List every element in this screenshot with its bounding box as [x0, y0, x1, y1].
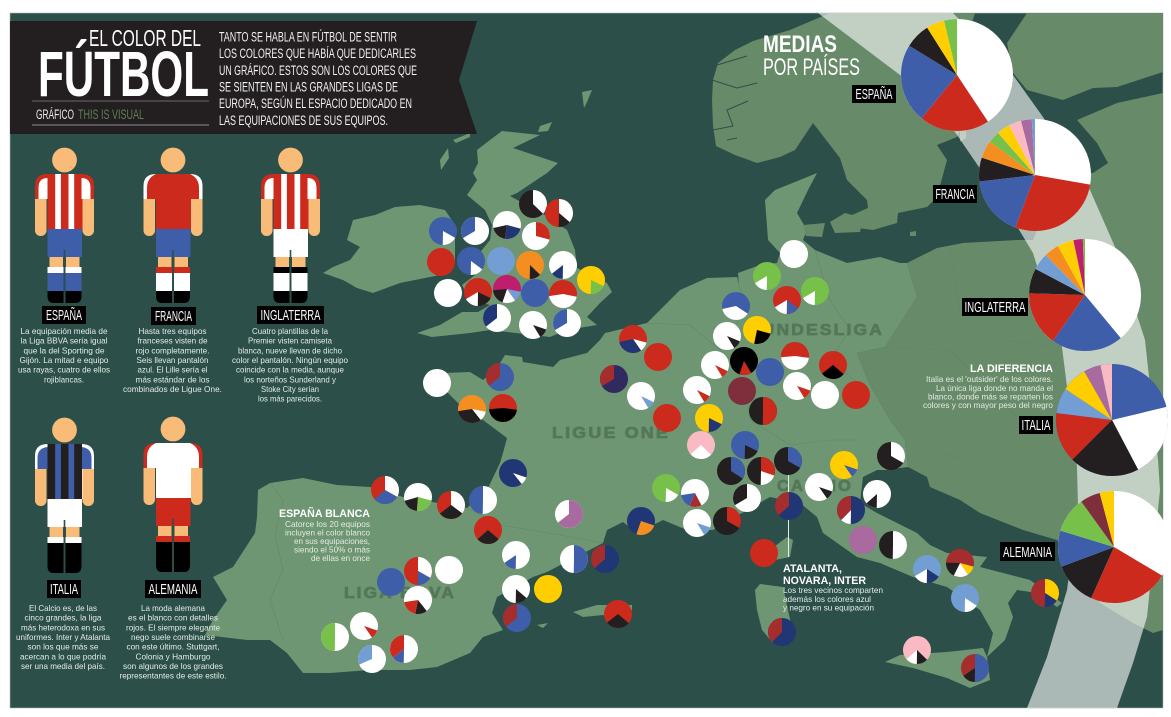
pie — [499, 459, 527, 487]
label: Alemania — [145, 580, 201, 598]
pie — [731, 431, 759, 459]
text: Inglaterra: los más parecidos. — [258, 394, 322, 404]
Norwegian fjords — [712, 56, 757, 140]
label: España: ESPAÑA — [46, 307, 82, 324]
text: Francia: azul. El Lille sería el — [138, 365, 208, 375]
label: Francia: FRANCIA — [155, 308, 192, 325]
player: Italia kit — [35, 418, 94, 573]
callout: Atalanta, Novara, Inter: NOVARA, INTER — [783, 575, 866, 587]
callout body: de ellas en once — [311, 553, 370, 563]
callout: La diferencia: La única liga donde no manda el — [936, 383, 1053, 393]
pie — [600, 365, 628, 393]
title line: Fútbol: FÚTBOL — [38, 38, 209, 110]
label: Italia: ITALIA — [50, 581, 78, 598]
pie — [522, 222, 550, 250]
team pies: Spain and southern France — [321, 363, 632, 673]
text: Francia: rojo completamente. — [136, 345, 210, 355]
label: Italia average — [1019, 416, 1053, 434]
text: Italia: uniformes. Inter y Atalanta — [16, 632, 110, 642]
pie — [553, 309, 581, 337]
text: Alemania — [120, 603, 226, 681]
pie — [627, 507, 655, 535]
pie — [830, 451, 858, 479]
map: landmasses of Europe — [205, 13, 1163, 688]
label: Inglaterra average: INGLATERRA — [964, 299, 1026, 316]
text: Inglaterra: blanca, nueve llevan de dicho — [238, 345, 342, 355]
text: Alemania: representantes de este estilo. — [120, 671, 226, 681]
callout body: en sus equipaciones, — [294, 536, 370, 546]
pie — [730, 347, 758, 375]
callout heading: ESPAÑA BLANCA — [279, 507, 370, 520]
pie — [728, 377, 756, 405]
text: España: usa rayas, cuatro de ellos — [18, 365, 110, 375]
team pies: England — [427, 190, 605, 339]
text: España: Gijón. La mitad e equipo — [20, 355, 109, 365]
pie — [404, 557, 432, 585]
country borders — [270, 130, 1062, 640]
header ribbon — [10, 21, 477, 134]
pie — [555, 500, 583, 528]
pie — [604, 600, 632, 628]
pie — [458, 395, 486, 423]
credit name: THIS IS VISUAL — [78, 107, 144, 122]
pie — [644, 343, 672, 371]
pie — [805, 473, 833, 501]
pie — [627, 382, 655, 410]
label: Italia — [47, 580, 81, 598]
pie — [390, 635, 418, 663]
text: Italia: más heterodoxa en sus — [21, 622, 105, 632]
pie — [756, 358, 784, 386]
intro text: UN GRÁFICO. ESTOS SON LOS COLORES QUE — [219, 63, 417, 78]
text: Francia — [123, 326, 222, 394]
land: Mallorca and Ibiza — [537, 605, 632, 628]
pie — [619, 325, 647, 353]
text: España: la Liga BBVA sería igual — [20, 336, 108, 346]
pie — [474, 516, 502, 544]
text: Italia: cinco grandes, la liga — [24, 613, 102, 623]
team pies: Germany and France — [600, 240, 870, 459]
text: Inglaterra: coincide con la media, aunque — [236, 365, 344, 375]
pie — [502, 575, 530, 603]
label: Francia average — [933, 185, 977, 203]
intro text: LAS EQUIPACIONES DE SUS EQUIPOS. — [219, 113, 388, 128]
label: Alemania average — [1000, 542, 1055, 561]
pie — [437, 491, 465, 519]
label: España average: ESPAÑA — [856, 86, 892, 103]
land: eastern Europe — [857, 93, 1163, 633]
label: Francia — [151, 307, 196, 325]
pie — [780, 240, 808, 268]
league name: Calcio: CALCIO — [777, 478, 853, 495]
pie — [722, 292, 750, 320]
pie — [591, 545, 619, 573]
text: España: que la del Sporting de — [24, 345, 105, 355]
pie — [516, 251, 544, 279]
text: Inglaterra: color el pantalón. Ningún equipo — [232, 355, 348, 365]
pie — [768, 618, 796, 646]
land: Ireland — [323, 205, 455, 293]
pie — [946, 549, 974, 577]
pie — [489, 394, 517, 422]
pie — [687, 431, 715, 459]
text: Inglaterra: Cuatro plantillas de la — [252, 326, 328, 336]
callout: Atalanta, Novara, Inter: ATALANTA, — [783, 563, 842, 575]
text: Italia: acercan a lo que podría — [20, 651, 106, 661]
callout body: siendo el 50% o más — [294, 544, 370, 554]
pie — [483, 304, 511, 332]
pie — [653, 404, 681, 432]
pie — [842, 381, 870, 409]
pie — [377, 568, 405, 596]
pie — [733, 484, 761, 512]
credit: GRÁFICO — [36, 107, 74, 122]
pie — [879, 531, 907, 559]
label: Alemania: ALEMANIA — [148, 581, 198, 598]
text: Italia: El Calcio es, de las — [29, 603, 97, 613]
text: España: rojiblancas. — [44, 374, 84, 384]
text: Alemania: con este último. Stuttgart, — [126, 642, 220, 652]
big pie: Italia — [1056, 364, 1168, 476]
intro text: EUROPA, SEGÚN EL ESPACIO DEDICADO EN — [219, 96, 412, 111]
pie — [1031, 579, 1059, 607]
label: España average — [852, 85, 896, 103]
pie — [502, 541, 530, 569]
pie — [903, 636, 931, 664]
title block — [32, 25, 209, 125]
land: Sicily — [885, 648, 990, 688]
pie — [434, 279, 462, 307]
player: España kit — [35, 148, 94, 303]
pie — [519, 190, 547, 218]
land: western and central Europe — [205, 173, 1062, 673]
callout: La diferencia: Italia es el 'outsider' de los colores. — [926, 374, 1053, 384]
pie — [701, 351, 729, 379]
intro text: TANTO SE HABLA EN FÚTBOL DE SENTIR — [219, 30, 397, 45]
pie — [951, 584, 979, 612]
text: Francia: Hasta tres equipos — [138, 326, 206, 336]
label: Italia average: ITALIA — [1022, 417, 1050, 434]
pie — [781, 342, 809, 370]
big pie: Inglaterra — [1029, 239, 1141, 351]
pie — [404, 483, 432, 511]
pie — [683, 509, 711, 537]
pie — [877, 442, 905, 470]
pie — [503, 604, 531, 632]
text: Francia: franceses visten de — [138, 336, 208, 346]
callout body: Catorce los 20 equipos — [285, 519, 370, 529]
callout line — [788, 475, 790, 557]
land: Corsica — [770, 537, 793, 560]
big pie: España — [901, 19, 1013, 131]
text: Alemania: son algunos de los grandes — [123, 661, 223, 671]
league name: Liga BBVA: LIGA BBVA — [344, 585, 456, 602]
pie — [549, 280, 577, 308]
pie — [457, 247, 485, 275]
pie — [371, 476, 399, 504]
pie — [469, 486, 497, 514]
pie — [863, 480, 891, 508]
callout: Atalanta, Novara, Inter — [783, 563, 883, 612]
label: Inglaterra — [257, 306, 324, 324]
player: Alemania kit — [144, 417, 202, 572]
pie — [753, 262, 781, 290]
pie — [749, 397, 777, 425]
pie — [521, 279, 549, 307]
callout: Atalanta, Novara, Inter: y negro en su equipación — [783, 602, 874, 612]
text: Italia — [16, 603, 110, 671]
callout: Atalanta, Novara, Inter: además los colores azul — [783, 594, 871, 604]
pie — [713, 322, 741, 350]
text: Francia: más estándar de los — [136, 374, 210, 384]
pie — [519, 311, 547, 339]
intro text — [219, 30, 417, 128]
callout: Atalanta, Novara, Inter: Los tres vecinos comparten — [783, 585, 883, 595]
pie — [577, 266, 605, 294]
pie — [358, 645, 386, 673]
big pie: Francia — [979, 119, 1091, 231]
pie — [801, 277, 829, 305]
callout: La diferencia: LA DIFERENCIA — [970, 363, 1053, 375]
text: Francia: combinados de Ligue One. — [123, 384, 222, 394]
grey sash behind national averages — [818, 13, 1160, 708]
pie — [429, 217, 457, 245]
land: Scandinavia — [712, 13, 975, 230]
pie — [837, 496, 865, 524]
pie — [493, 211, 521, 239]
pie — [487, 247, 515, 275]
label: España — [42, 306, 86, 324]
land: Scottish islands — [440, 90, 592, 170]
text: Italia: son los que más se — [28, 642, 99, 652]
pie — [350, 612, 378, 640]
label: Alemania average: ALEMANIA — [1003, 544, 1052, 561]
pie — [461, 217, 489, 245]
callout body — [285, 519, 370, 563]
text: Francia: Seis llevan pantalón — [136, 355, 209, 365]
pie — [560, 545, 588, 573]
land: Sardinia — [755, 584, 793, 643]
land: Finland and Russia — [1007, 13, 1163, 100]
pie — [545, 199, 573, 227]
land: Great Britain — [417, 131, 612, 337]
pie — [549, 251, 577, 279]
pie — [435, 556, 463, 584]
title line: El color del: EL COLOR DEL — [89, 25, 201, 51]
heading: Medias por países: POR PAÍSES — [763, 54, 860, 81]
pie — [493, 275, 521, 303]
big pie: Alemania — [1058, 491, 1170, 603]
text: Alemania: La moda alemana — [141, 603, 205, 613]
pie — [534, 575, 562, 603]
callout: La diferencia: colores y con mayor peso del negro — [923, 400, 1053, 410]
text: España: La equipación media de — [20, 326, 108, 336]
pie — [849, 526, 877, 554]
pie — [404, 586, 432, 614]
text: Inglaterra — [232, 326, 348, 404]
team pies: Italy — [627, 431, 1059, 682]
callout: España blanca — [279, 507, 370, 563]
callout: La diferencia: blanco, donde más se reparten los — [928, 392, 1053, 402]
intro text: LOS COLORES QUE HABÍA QUE DEDICARLES — [219, 46, 416, 61]
label: Inglaterra: INGLATERRA — [260, 307, 320, 324]
pie — [775, 492, 803, 520]
pie — [774, 447, 802, 475]
pie — [773, 286, 801, 314]
text: Inglaterra: los norteños Sunderland y — [244, 374, 337, 384]
pie — [486, 363, 514, 391]
pie — [819, 351, 847, 379]
text: Alemania: Colonia y Hamburgo — [136, 651, 211, 661]
text: Inglaterra: Stoke City serían — [261, 384, 319, 394]
pie — [423, 369, 451, 397]
pie — [913, 555, 941, 583]
label: Inglaterra average — [962, 298, 1028, 316]
pie — [427, 248, 455, 276]
heading: Medias por países — [763, 31, 860, 81]
text: España — [18, 326, 110, 384]
text: Italia: ser una media del país. — [21, 661, 105, 671]
league name: Ligue One: LIGUE ONE — [552, 425, 670, 442]
player: Francia kit — [144, 148, 202, 303]
text: Inglaterra: Premier visten camiseta — [248, 336, 332, 346]
pie — [783, 372, 811, 400]
text: Alemania: rojos. El siempre elegante — [126, 622, 220, 632]
land: small islands — [803, 122, 966, 237]
pie — [961, 654, 989, 682]
player: Inglaterra kit — [261, 148, 320, 303]
pie — [652, 474, 680, 502]
pie — [681, 479, 709, 507]
pie — [743, 316, 771, 344]
label: Francia average: FRANCIA — [936, 186, 974, 203]
pie — [321, 623, 349, 651]
pie — [717, 457, 745, 485]
pie — [750, 539, 778, 567]
heading: Medias por países: MEDIAS — [763, 31, 837, 58]
pie — [464, 278, 492, 306]
text: Alemania: nego suele combinarse — [131, 632, 215, 642]
callout: La diferencia — [923, 363, 1053, 410]
league name: Bundesliga: BUNDESLIGA — [747, 322, 884, 339]
pie — [695, 404, 723, 432]
callout body: incluyen el color blanco — [285, 528, 370, 538]
pie — [811, 381, 839, 409]
pie — [683, 376, 711, 404]
intro text: SE SIENTEN EN LAS GRANDES LIGAS DE — [219, 80, 398, 95]
pie — [713, 507, 741, 535]
text: Alemania: es el blanco con detalles — [128, 613, 218, 623]
pie — [747, 457, 775, 485]
